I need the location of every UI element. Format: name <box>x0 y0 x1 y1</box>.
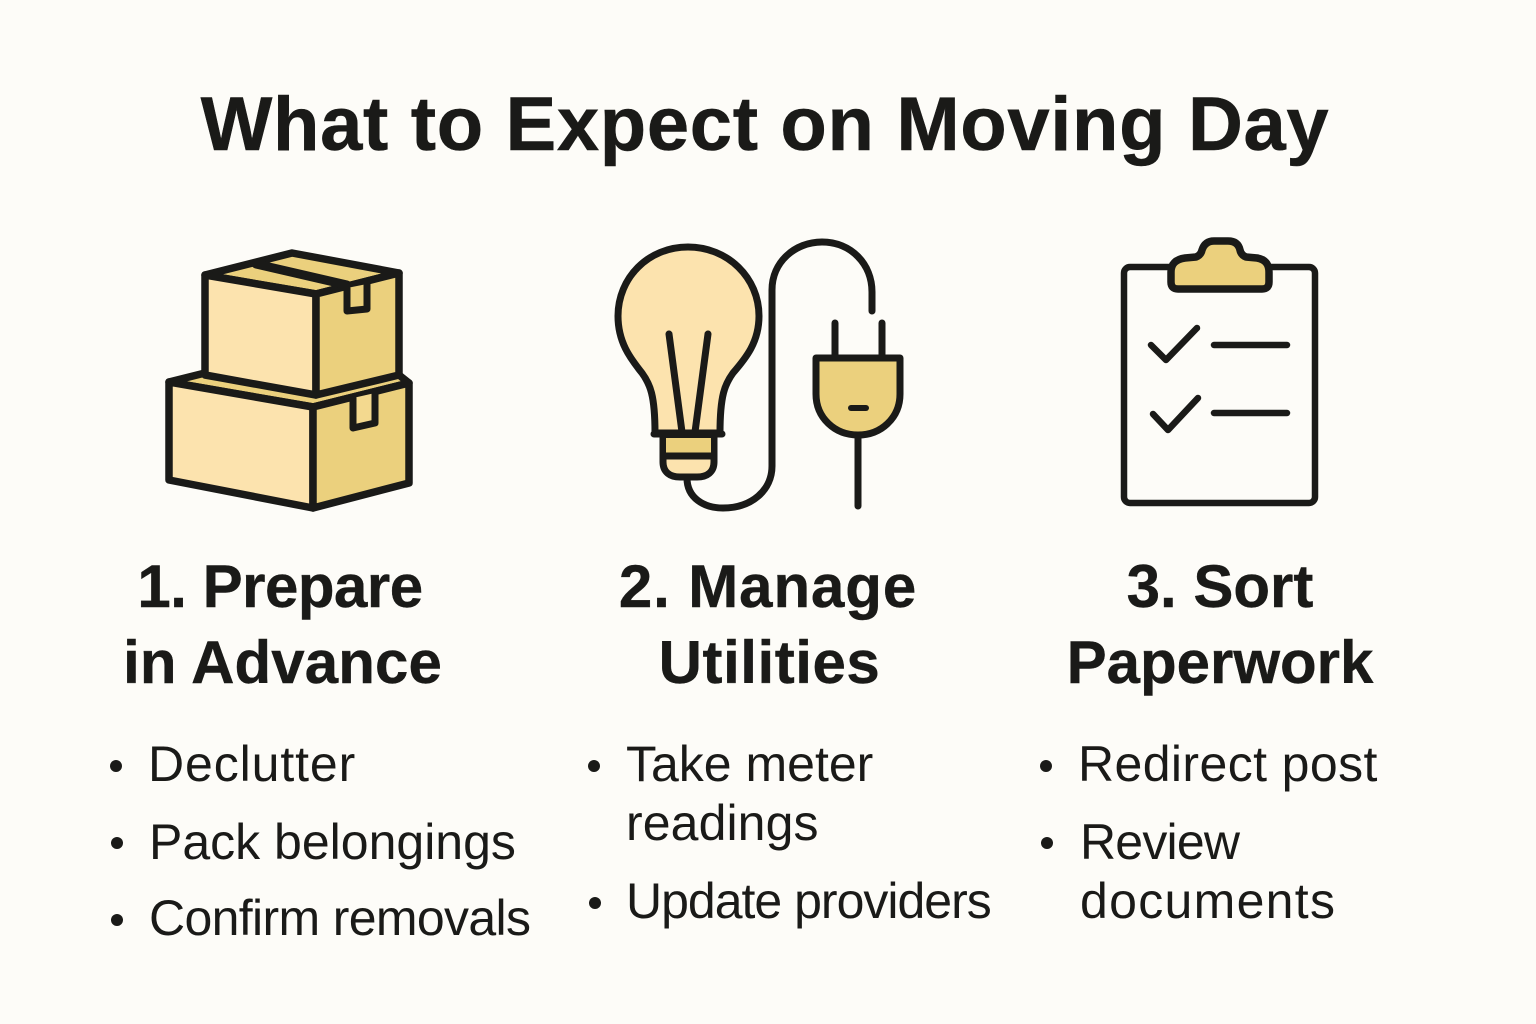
title: What to Expect on Moving Day <box>201 82 1329 167</box>
list: step 3: documents <box>1080 873 1336 929</box>
heading: step 2 <box>619 553 917 696</box>
icon: stacked boxes <box>165 249 413 512</box>
heading: step 1: 1. Prepare <box>137 553 423 620</box>
icon: clipboard checklist <box>1120 237 1318 506</box>
list: step 2: Take meter <box>626 736 873 792</box>
list: step 2: Update providers <box>626 873 991 929</box>
list: step 1 <box>110 736 530 946</box>
heading: step 3 <box>1067 553 1374 696</box>
heading: step 1: in Advance <box>123 629 442 696</box>
list: step 3: Review <box>1080 814 1239 870</box>
heading: step 3: Paperwork <box>1067 629 1373 696</box>
heading: step 2: 2. Manage <box>619 553 917 620</box>
icon: light bulb and plug <box>614 238 904 512</box>
heading: step 1 <box>123 553 442 696</box>
list: step 1: Pack belongings <box>149 814 516 870</box>
list: step 3 <box>1040 736 1378 929</box>
list: step 1: Declutter <box>148 736 356 792</box>
list: step 1: Confirm removals <box>149 890 530 946</box>
heading: step 2: Utilities <box>659 629 880 696</box>
list: step 3: Redirect post <box>1078 736 1378 792</box>
list: step 2 <box>588 736 991 929</box>
list: step 2: readings <box>626 795 819 851</box>
heading: step 3: 3. Sort <box>1127 553 1313 620</box>
